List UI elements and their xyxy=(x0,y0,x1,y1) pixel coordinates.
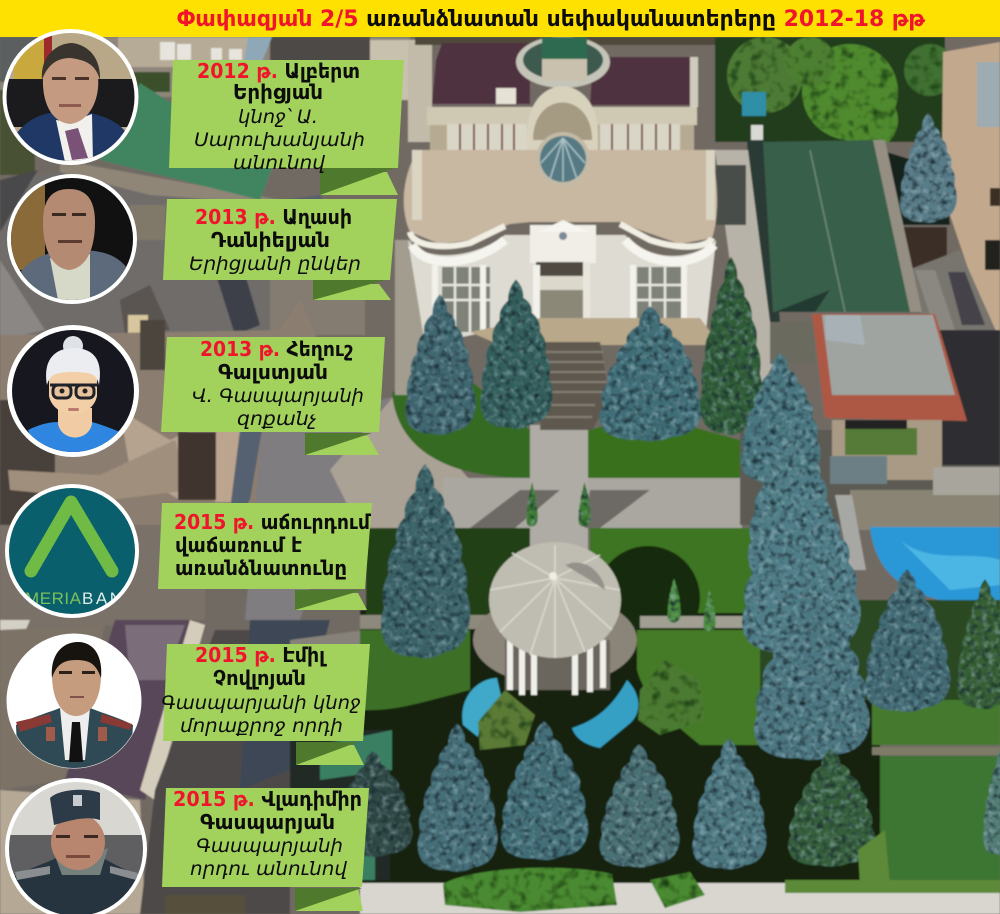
upper roof xyxy=(432,43,530,104)
label: 2015 Vladimir Gasparyan: Գասպարյան xyxy=(200,810,335,834)
label: 2015 bank auction: 2015 թ. աճուրդում xyxy=(174,510,371,534)
label: 2015 Emil Chovlyan xyxy=(161,643,370,765)
label: 2015 Vladimir Gasparyan: որդու անունով xyxy=(190,858,348,880)
portrait: Vladimir Gasparyan xyxy=(0,778,150,914)
portrait: Emil Chovlyan xyxy=(6,634,142,770)
label: 2012 Albert Yeritsyan: 2012 թ. Ալբերտ xyxy=(197,59,360,83)
shrubs xyxy=(478,660,705,750)
title: Փափազյան 2/5 առանձնատան սեփականատերերը 2012-18 թթ xyxy=(177,7,925,32)
leafy trees behind mansion xyxy=(727,37,956,150)
mansion xyxy=(395,36,720,430)
header banner xyxy=(0,0,1000,37)
fountain pools xyxy=(462,678,502,737)
right grounds xyxy=(740,430,1000,525)
glass dome xyxy=(536,132,590,186)
label: 2013 Heghush Galstyan: Գալստյան xyxy=(218,360,328,384)
portico xyxy=(536,262,586,288)
spruce trees xyxy=(335,113,1000,872)
label: 2015 bank auction: վաճառում է xyxy=(175,533,302,557)
label: 2015 Vladimir Gasparyan: 2015 թ. Վլադիմիր xyxy=(173,787,362,811)
label: 2015 Emil Chovlyan: մորաքրոջ որդի xyxy=(180,715,343,737)
label: 2015 Emil Chovlyan: 2015 թ. Էմիլ xyxy=(195,643,328,667)
label: 2015 Vladimir Gasparyan: Գասպարյանի xyxy=(196,835,343,857)
swimming pool xyxy=(870,527,1000,600)
right side building xyxy=(942,42,1000,345)
label: 2012 Albert Yeritsyan: Երիցյան xyxy=(233,80,323,104)
gazebo xyxy=(473,542,637,695)
label: 2015 Emil Chovlyan: Չովլոյան xyxy=(213,666,306,690)
label: 2013 Aghasi Danielyan: Դանիելյան xyxy=(211,228,330,252)
portrait: Albert Yeritsyan xyxy=(0,29,140,165)
rotunda xyxy=(516,36,610,88)
green roof annex xyxy=(747,140,780,322)
plaza and paths xyxy=(443,478,742,528)
dark underlay of the garden xyxy=(360,610,880,885)
boundary wall and hedge xyxy=(360,883,1000,914)
green metal roof, left xyxy=(100,83,272,200)
label: 2015 bank auction: առանձնատունը xyxy=(175,556,347,580)
label: 2013 Aghasi Danielyan: Երիցյանի ընկեր xyxy=(189,253,361,275)
label: 2015 Vladimir Gasparyan xyxy=(162,787,369,911)
label: 2012 Albert Yeritsyan: Սարուխանյանի xyxy=(194,129,365,151)
roof terrace xyxy=(404,150,717,244)
left neighbouring buildings xyxy=(0,37,470,914)
label: 2013 Heghush Galstyan xyxy=(161,337,385,455)
logo: Ameriabank xyxy=(0,484,146,620)
logo: Ameriabank: BAN xyxy=(82,589,122,608)
portrait: Aghasi Danielyan xyxy=(7,174,137,304)
label: 2013 Aghasi Danielyan xyxy=(163,199,397,300)
portrait: avatar of Heghush Galstyan xyxy=(7,325,139,457)
lawns xyxy=(392,380,530,478)
label: 2013 Heghush Galstyan: զոքանչ xyxy=(237,408,317,430)
label: 2013 Heghush Galstyan: Վ. Գասպարյանի xyxy=(192,385,364,407)
label: 2012 Albert Yeritsyan: անունով xyxy=(233,152,326,174)
logo: Ameriabank: MERIA xyxy=(25,589,82,608)
upper storey xyxy=(427,107,697,125)
label: 2015 Emil Chovlyan: Գասպարյանի կնոջ xyxy=(161,692,361,714)
side terraces xyxy=(395,240,425,395)
label: 2012 Albert Yeritsyan: կնոջ՝ Ա. xyxy=(238,106,318,128)
label: 2013 Heghush Galstyan: 2013 թ. Հեղուշ xyxy=(200,337,353,361)
label: 2015 bank auction xyxy=(158,503,372,610)
patio and stairs xyxy=(470,318,720,345)
label: 2012 Albert Yeritsyan xyxy=(169,59,404,195)
label: 2013 Aghasi Danielyan: 2013 թ. Աղասի xyxy=(195,205,352,229)
red roof building xyxy=(812,314,967,421)
bay windows xyxy=(442,267,490,332)
colonnade facade xyxy=(408,235,716,345)
